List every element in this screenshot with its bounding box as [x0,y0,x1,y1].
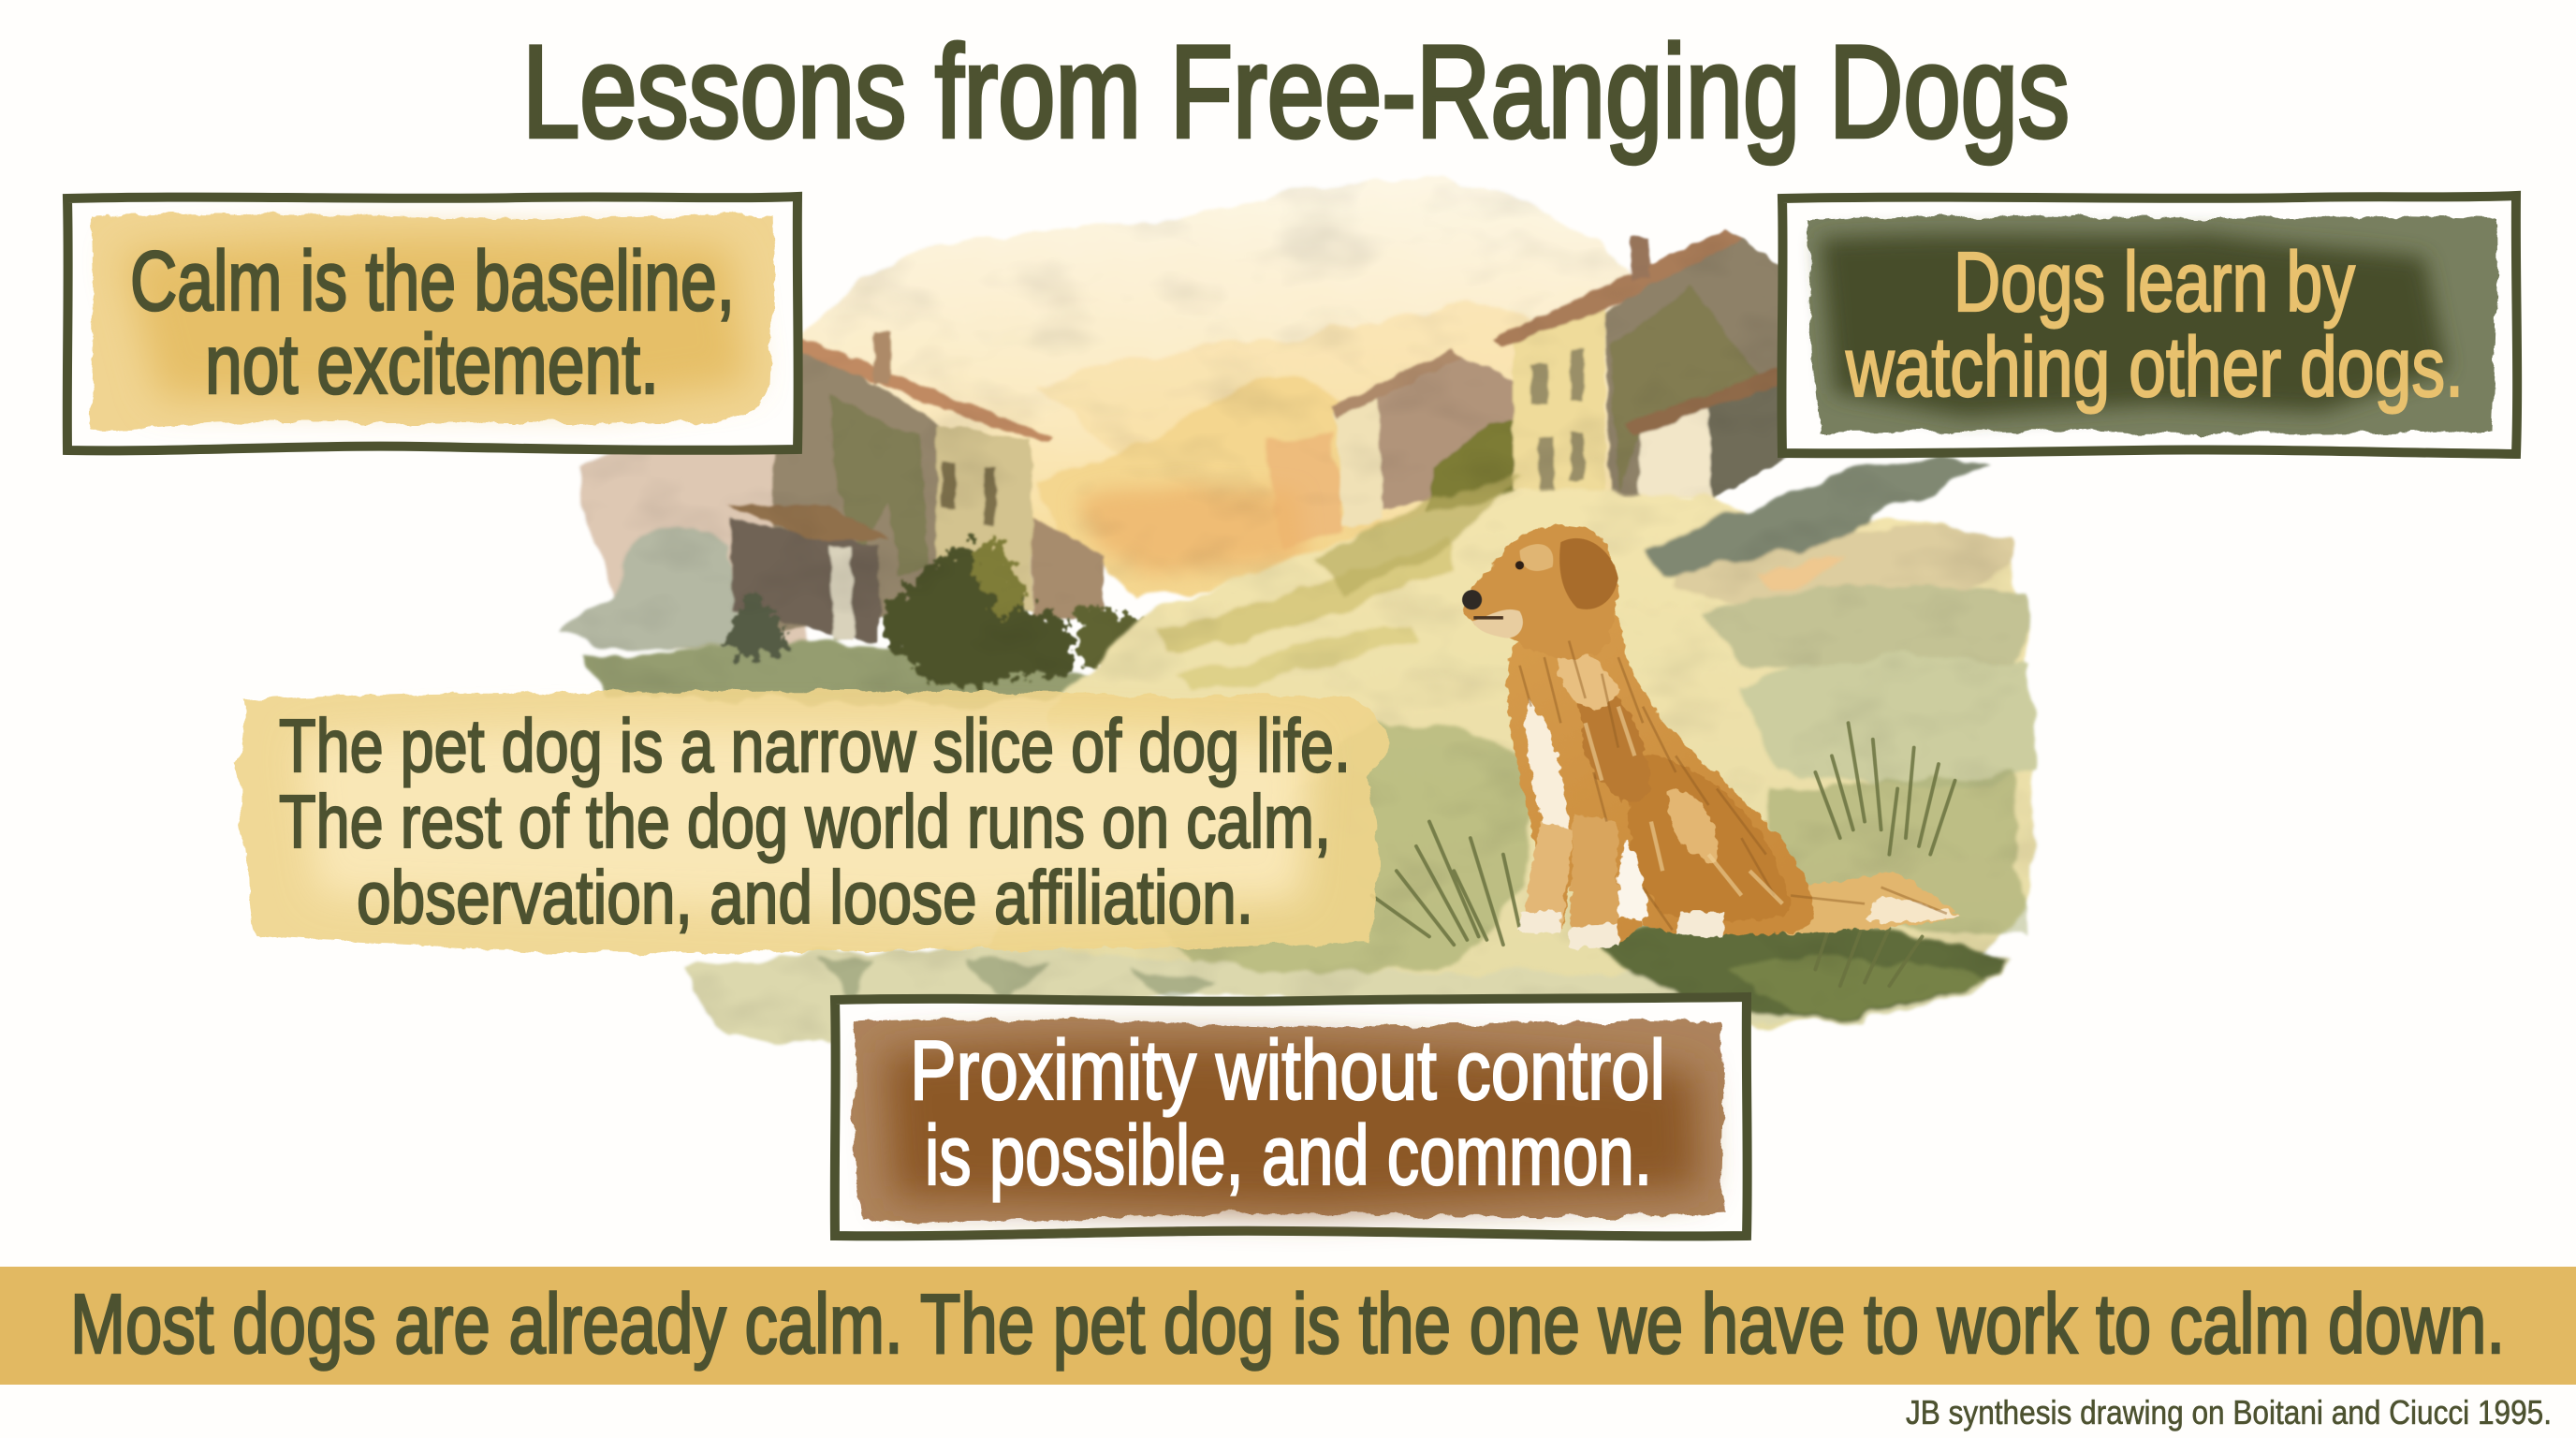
dog eye [1515,561,1524,569]
sky wash [731,179,1676,567]
dog white chest [1525,698,1569,848]
meadow wash [986,459,2037,1027]
scene wrapper with pigment texture [559,179,2037,1042]
note text: observation, and loose affiliation. [357,856,1253,939]
middle house [1377,353,1515,509]
big house roof and chimney [1492,228,1741,346]
callout text: is possible, and common. [925,1109,1652,1203]
title: Lessons from Free-Ranging Dogs [522,18,2070,165]
callout text [1845,236,2464,415]
frame [67,197,798,450]
frame [835,997,1748,1236]
banner band [0,1267,2576,1385]
callout text: Calm is the baseline, [130,235,735,329]
grass tufts [1372,723,1955,986]
panel: learn by watching callout [1781,196,2517,454]
dog haunch shade [1629,756,1791,921]
callout text [910,1024,1665,1203]
callout text: Proximity without control [910,1024,1665,1118]
watercolor wash [90,214,774,430]
dog legs [1569,814,1618,946]
dog mouth [1473,617,1503,619]
dog ear [1559,538,1618,609]
big house front [1513,302,1605,500]
dog tail [1766,873,1960,933]
bottom banner [0,1267,2576,1385]
panel: pet dog narrow slice note [234,691,1388,953]
main wall [772,342,940,633]
far hills [1035,378,1397,600]
dog highlights [1586,707,1782,903]
left bushes [723,534,1232,690]
dog shape with ragged fur edges [1462,525,1960,948]
callout text: not excitement. [205,318,659,412]
panel: calm baseline callout [67,197,798,450]
dog [1462,525,1960,948]
watercolor wash [234,691,1388,953]
left ground [583,642,1150,707]
tower [936,424,1032,611]
illustration: watercolor village and dog [559,179,2037,1042]
watercolor wash [854,1019,1723,1222]
dog brow patch [1519,544,1553,571]
dog body [1507,600,1813,946]
dog head [1462,525,1617,658]
frame [1781,196,2517,454]
right village houses [1331,228,1815,529]
roof and chimney [788,337,1051,442]
callout text [130,235,735,412]
orange foothills [1076,483,1306,575]
dog muzzle [1472,609,1523,638]
watercolor wash [1807,216,2497,434]
foreground grass wash [681,721,2012,1042]
right annex [1032,518,1104,621]
callout text: Dogs learn by [1954,236,2355,330]
dog fur strokes [1519,640,1947,930]
note text [279,704,1351,939]
big house side wall [1605,230,1815,501]
hedge [1426,420,1518,526]
panel: proximity without control callout [835,997,1748,1236]
lean-to [731,520,879,644]
lower house [1640,407,1712,501]
dog nose [1462,590,1482,609]
note text: The rest of the dog world runs on calm, [279,780,1331,863]
left village houses [726,332,1104,644]
pink haze behind left houses [559,432,813,657]
note text: The pet dog is a narrow slice of dog life. [279,704,1351,787]
